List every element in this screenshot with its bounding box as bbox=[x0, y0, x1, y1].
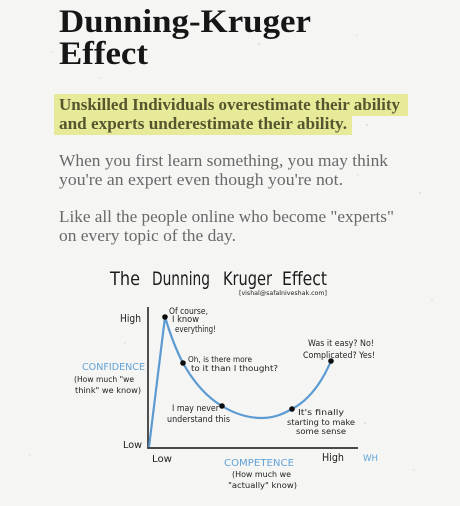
paragraph: online experts bbox=[59, 207, 394, 245]
annotation: never understand bbox=[167, 404, 231, 425]
annotation: complicated: Was it easy? No! bbox=[308, 339, 374, 349]
curve markers bbox=[162, 314, 334, 412]
chart title: The bbox=[109, 268, 140, 290]
y axis low label: Low bbox=[123, 440, 142, 451]
chart title: Effect bbox=[282, 268, 327, 290]
confidence label: think" we know) bbox=[75, 386, 141, 395]
highlighted statement bbox=[54, 94, 408, 135]
title: Dunning-Kruger bbox=[59, 4, 311, 40]
annotation: more to it bbox=[188, 355, 278, 373]
competence label: "actually" know) bbox=[228, 481, 297, 490]
chart title bbox=[109, 268, 327, 290]
paragraph: first learn bbox=[59, 151, 389, 189]
annotation: making sense: It's finally bbox=[298, 408, 344, 417]
cropped label: WH bbox=[363, 454, 378, 464]
annotation: complicated bbox=[303, 339, 375, 361]
annotation: making sense bbox=[287, 408, 355, 436]
chart title: Kruger bbox=[223, 268, 272, 290]
chart: Dunning Kruger curve bbox=[74, 268, 378, 490]
y axis high label: High bbox=[120, 312, 141, 325]
title: Effect bbox=[59, 36, 148, 72]
annotation: peak: everything! bbox=[175, 325, 216, 335]
highlighted statement: and experts underestimate their ability. bbox=[59, 114, 347, 133]
paragraph: first learn: When you first learn something, you may think bbox=[59, 151, 389, 170]
annotation: peak bbox=[169, 307, 216, 335]
annotation: peak: Of course, bbox=[169, 307, 208, 317]
annotation: complicated: Complicated? Yes! bbox=[303, 351, 375, 361]
competence label bbox=[224, 458, 297, 490]
chart title: Dunning bbox=[152, 268, 210, 290]
curve bbox=[149, 317, 331, 447]
annotation: making sense: starting to make bbox=[287, 418, 355, 427]
title bbox=[59, 4, 311, 72]
chart credit: [vishal@safalniveshak.com] bbox=[239, 289, 327, 297]
paragraph: online experts: on every topic of the day. bbox=[59, 226, 236, 245]
confidence label: (How much "we bbox=[74, 375, 134, 384]
annotation: more to it: Oh, is there more bbox=[188, 355, 252, 364]
paragraph: first learn: you're an expert even though you're not. bbox=[59, 170, 343, 189]
paragraph: online experts: Like all the people online who become "experts" bbox=[59, 207, 394, 226]
annotation: more to it: to it than I thought? bbox=[191, 364, 278, 373]
axes bbox=[148, 307, 358, 448]
annotation: peak: I know bbox=[172, 315, 199, 325]
annotation: never understand: understand this bbox=[167, 415, 231, 425]
annotation: never understand: I may never bbox=[172, 404, 219, 414]
confidence label: CONFIDENCE bbox=[82, 362, 145, 373]
competence label: (How much we bbox=[232, 470, 291, 479]
confidence label bbox=[74, 362, 145, 395]
annotation: making sense: some sense bbox=[296, 427, 346, 436]
competence label: COMPETENCE bbox=[224, 458, 294, 469]
x axis low label: Low bbox=[152, 454, 172, 465]
highlighted statement: Unskilled Individuals overestimate their ability bbox=[59, 95, 400, 114]
x axis high label: High bbox=[322, 451, 344, 464]
